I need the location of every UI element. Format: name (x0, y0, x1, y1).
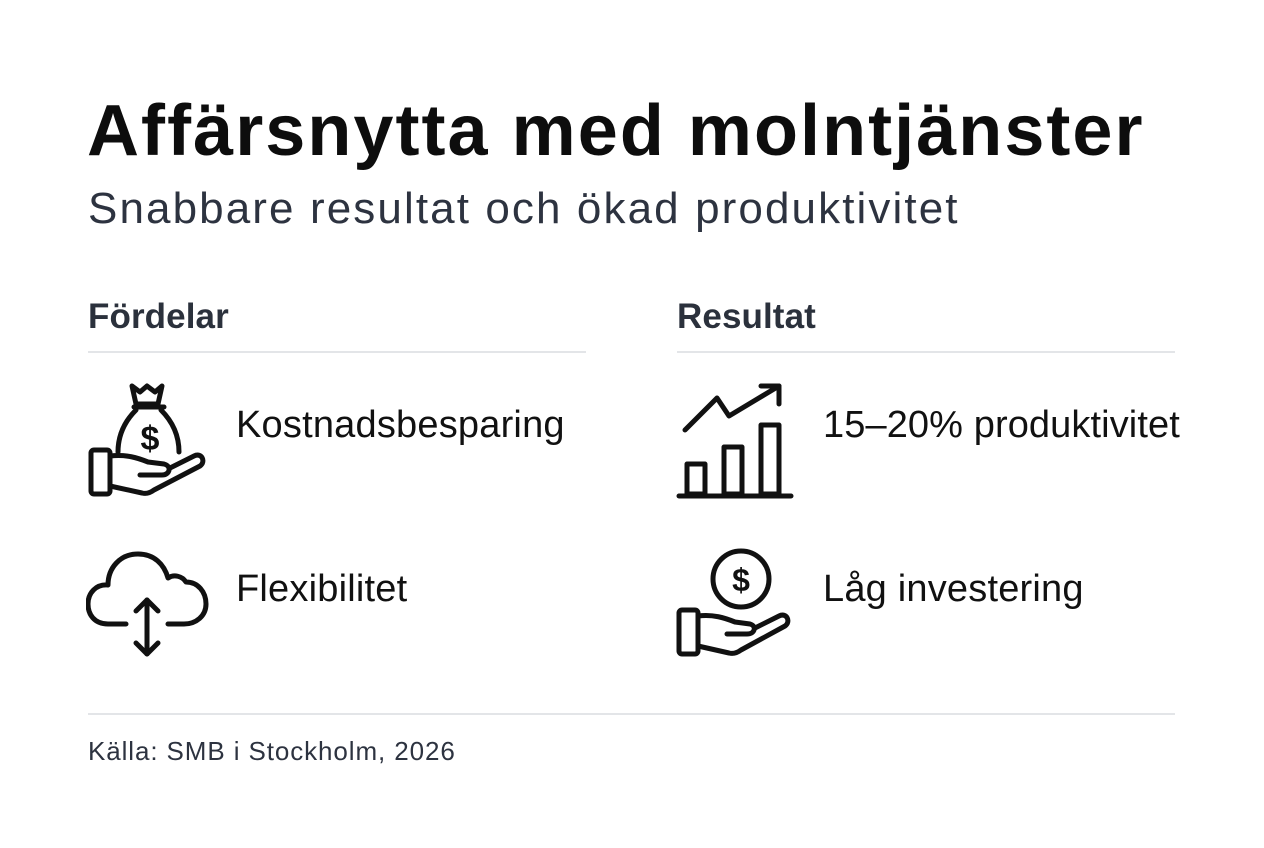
icon: coin in hand: $ (732, 562, 750, 598)
text: Flexibilitet: Flexibilitet (236, 568, 407, 610)
icon: coin in hand (676, 548, 790, 656)
source: Källa: SMB i Stockholm, 2026 (88, 736, 456, 766)
heading: Resultat: Resultat (677, 297, 816, 336)
text: 15–20% produktivitet: 15–20% produktivitet (823, 404, 1180, 446)
icon: cloud with arrows (86, 552, 208, 656)
icon: money bag in hand: $ (141, 420, 160, 458)
title: Affärsnytta med molntjänster (87, 91, 1145, 171)
text: Låg investering: Låg investering (823, 568, 1084, 610)
icon: money bag in hand (88, 383, 206, 496)
subtitle: Snabbare resultat och ökad produktivitet (88, 184, 960, 233)
icon: growth chart (676, 384, 794, 498)
heading: Fördelar: Fördelar (88, 297, 229, 336)
text: Kostnadsbesparing: Kostnadsbesparing (236, 404, 565, 446)
